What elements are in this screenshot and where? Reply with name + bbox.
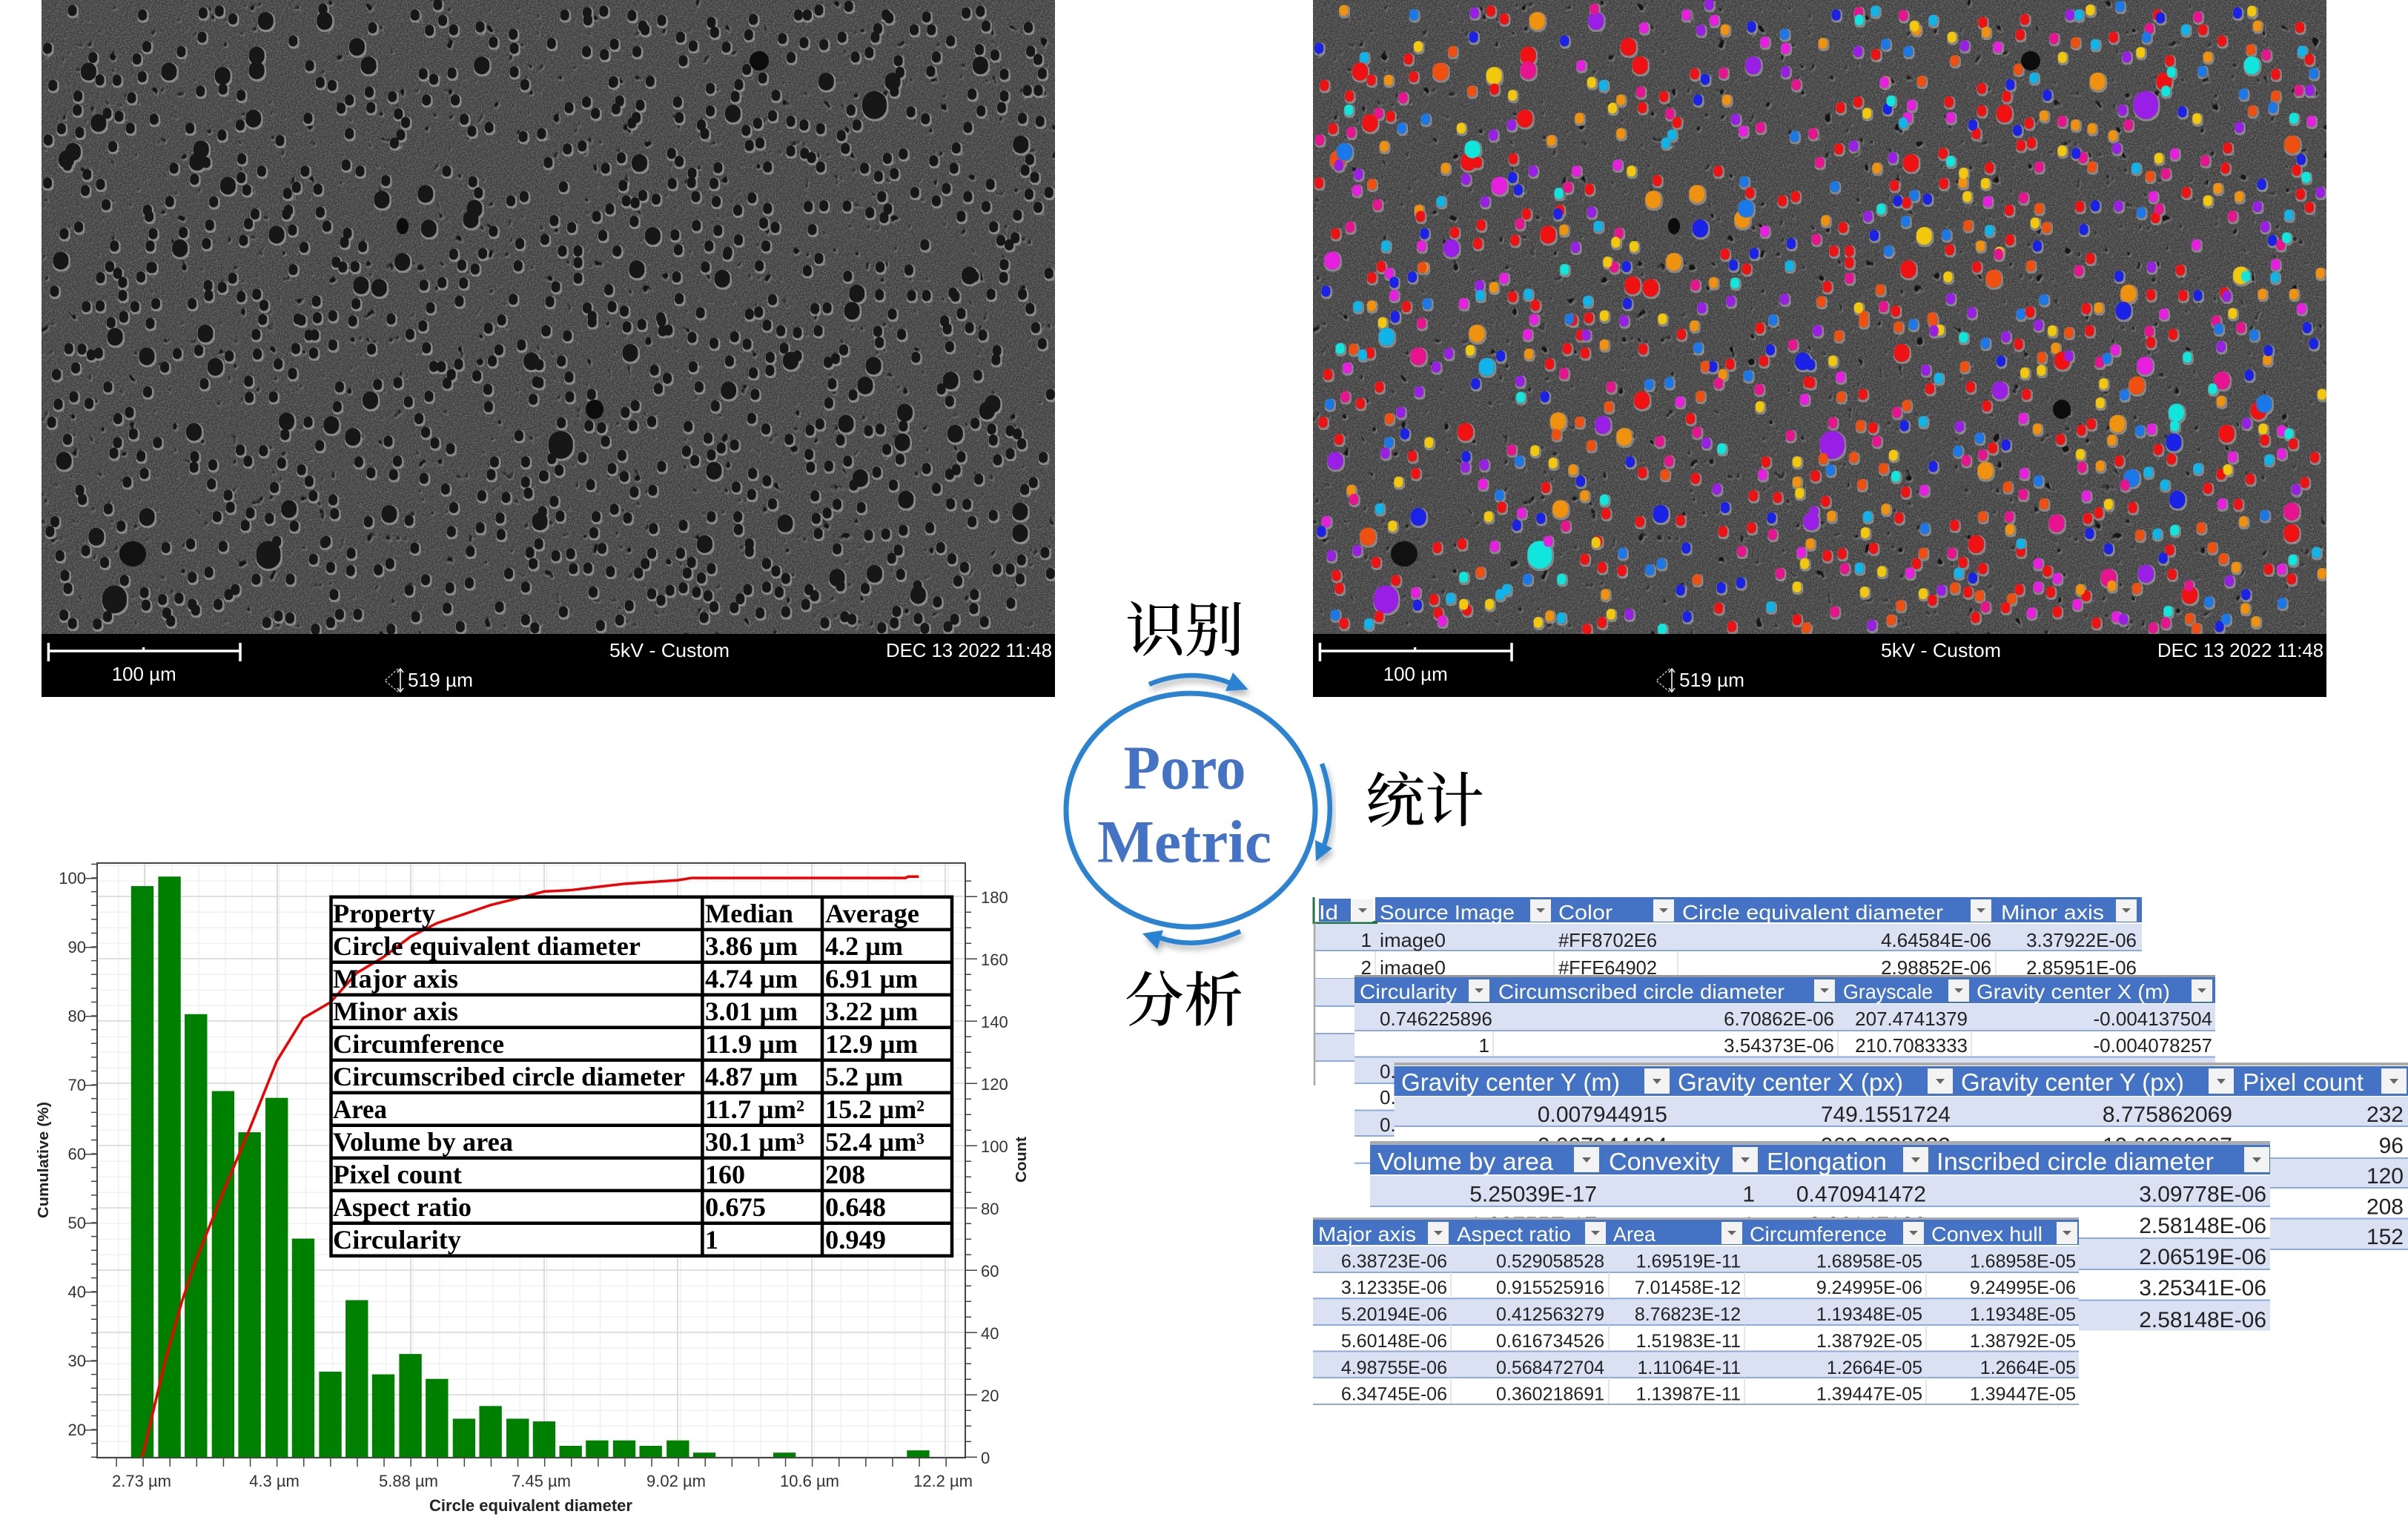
spreadsheet layer 4: volume, convexity, elongation: 3.09778E-06 bbox=[2139, 1182, 2266, 1207]
spreadsheet layer 4: volume, convexity, elongation: 1 bbox=[1742, 1182, 1755, 1207]
SEM image: segmented pores in colour: 100 µm bbox=[1383, 663, 1448, 685]
right axis labels: 20 bbox=[981, 1387, 999, 1405]
spreadsheet layer 4: volume, convexity, elongation: Volume by area bbox=[1377, 1148, 1554, 1175]
spreadsheet layer 3: gravity center, pixel count: 8.775862069 bbox=[2103, 1103, 2232, 1127]
SEM image: segmented pores in colour: DEC 13 2022 11:48 bbox=[2157, 639, 2323, 661]
x axis labels: 12.2 µm bbox=[913, 1472, 973, 1490]
spreadsheet layer 5: major axis, aspect ratio, area: 7.01458E-12 bbox=[1635, 1278, 1741, 1298]
pore property statistics table: 3.22 µm bbox=[825, 997, 918, 1026]
right axis labels: 80 bbox=[981, 1200, 999, 1218]
spreadsheet layer 3: gravity center, pixel count: Gravity center Y (px) bbox=[1961, 1068, 2184, 1096]
spreadsheet layer 4: volume, convexity, elongation: Convexity bbox=[1609, 1148, 1721, 1175]
right axis labels: 60 bbox=[981, 1262, 999, 1280]
label: statistics: 统计 bbox=[1366, 770, 1484, 835]
spreadsheet layer 1: id, source image, color: 3.37922E-06 bbox=[2026, 929, 2137, 951]
spreadsheet layer 5: major axis, aspect ratio, area: 6.34745E-06 bbox=[1341, 1384, 1447, 1405]
label: identify: 识别 bbox=[1125, 599, 1244, 664]
arrow: identify bbox=[1149, 672, 1248, 691]
spreadsheet layer 5: major axis, aspect ratio, area: 0.616734526 bbox=[1496, 1331, 1604, 1352]
pore property statistics table: Volume by area bbox=[333, 1127, 513, 1157]
spreadsheet layer 3: gravity center, pixel count: Gravity center X (px) bbox=[1678, 1068, 1903, 1096]
SEM image: original micrograph: DEC 13 2022 11:48 bbox=[886, 639, 1052, 661]
arrow: statistics bbox=[1315, 764, 1332, 862]
spreadsheet layer 5: major axis, aspect ratio, area: Circumference bbox=[1750, 1223, 1887, 1246]
pore property statistics table: 5.2 µm bbox=[825, 1062, 903, 1091]
central cycle diagram bbox=[1066, 599, 1484, 1034]
pore property statistics table bbox=[331, 897, 952, 1256]
spreadsheet layer 5: major axis, aspect ratio, area: 1.68958E-05 bbox=[1816, 1252, 1922, 1272]
spreadsheet layer 2: circularity, grayscale: 210.7083333 bbox=[1855, 1034, 1968, 1057]
spreadsheet layer 5: major axis, aspect ratio, area: 1.11064E-11 bbox=[1638, 1358, 1741, 1378]
spreadsheet layer 5: major axis, aspect ratio, area: 1.2664E-05 bbox=[1980, 1358, 2076, 1378]
spreadsheet layer 5: major axis, aspect ratio, area: 1.38792E-05 bbox=[1816, 1331, 1922, 1352]
spreadsheet layer 3: gravity center, pixel count: 0.007944915 bbox=[1538, 1103, 1667, 1127]
spreadsheet layer 1: id, source image, color: #FFE64902 bbox=[1558, 956, 1657, 979]
spreadsheet layer 5: major axis, aspect ratio, area: 1.19348E-05 bbox=[1816, 1304, 1922, 1325]
spreadsheet layer 2: circularity, grayscale: 1 bbox=[1479, 1034, 1489, 1057]
pore property statistics table: Major axis bbox=[333, 964, 458, 994]
spreadsheet layer 2: circularity, grayscale: -0.004078257 bbox=[2094, 1034, 2212, 1057]
left axis labels: 60 bbox=[68, 1145, 86, 1163]
spreadsheet layer 2: circularity, grayscale: 0. bbox=[1380, 1114, 1396, 1136]
circle with PoroMetric title: Poro bbox=[1124, 734, 1246, 803]
pore property statistics table: 160 bbox=[705, 1160, 745, 1189]
pore property statistics table: 1 bbox=[705, 1225, 718, 1255]
spreadsheet layer 3: gravity center, pixel count: 152 bbox=[2366, 1225, 2404, 1249]
pore property statistics table: Property bbox=[333, 899, 435, 928]
spreadsheet layer 4: volume, convexity, elongation: 0.470941472 bbox=[1796, 1182, 1926, 1207]
pore property statistics table: 12.9 µm bbox=[825, 1029, 918, 1059]
SEM image: original micrograph: 519 µm bbox=[408, 669, 473, 691]
spreadsheet layer 4: volume, convexity, elongation: 5.25039E-17 bbox=[1469, 1182, 1597, 1207]
spreadsheet layer 1: id, source image, color: Color bbox=[1558, 901, 1612, 924]
pore property statistics table: 15.2 µm² bbox=[825, 1094, 924, 1124]
spreadsheet layer 5: major axis, aspect ratio, area: 6.38723E-06 bbox=[1341, 1252, 1447, 1272]
spreadsheet layer 5: major axis, aspect ratio, area: 1.38792E-05 bbox=[1970, 1331, 2076, 1352]
spreadsheet layer 2: circularity, grayscale: Grayscale bbox=[1843, 980, 1933, 1003]
pore property statistics table: Pixel count bbox=[333, 1160, 462, 1189]
spreadsheet layer 5: major axis, aspect ratio, area: 5.60148E-06 bbox=[1341, 1331, 1447, 1352]
spreadsheet layer 5: major axis, aspect ratio, area: 5.20194E-06 bbox=[1341, 1304, 1447, 1325]
spreadsheet layer 3: gravity center, pixel count: 96 bbox=[2379, 1134, 2404, 1158]
left axis labels: 80 bbox=[68, 1007, 86, 1025]
spreadsheet layer 5: major axis, aspect ratio, area: 4.98755E-06 bbox=[1341, 1358, 1447, 1378]
left axis labels: 70 bbox=[68, 1076, 86, 1094]
spreadsheet layer 5: major axis, aspect ratio, area: 1.69519E-11 bbox=[1636, 1252, 1741, 1272]
x axis labels: 10.6 µm bbox=[780, 1472, 839, 1490]
green histogram bars bbox=[131, 876, 930, 1457]
right axis title: Count bbox=[1013, 1137, 1030, 1183]
spreadsheet layer 3: gravity center, pixel count: Gravity center Y (m) bbox=[1401, 1068, 1620, 1096]
pore property statistics table: Circle equivalent diameter bbox=[333, 931, 641, 961]
pore property statistics table: Minor axis bbox=[333, 997, 458, 1026]
left axis title: Cumulative (%) bbox=[36, 1102, 52, 1218]
spreadsheet layer 4: volume, convexity, elongation: Elongation bbox=[1767, 1148, 1887, 1175]
spreadsheet layer 1: id, source image, color: Id bbox=[1319, 901, 1338, 924]
right axis labels: 180 bbox=[981, 888, 1008, 907]
left axis labels: 40 bbox=[68, 1283, 86, 1301]
SEM image: original micrograph bbox=[42, 0, 1055, 697]
pore property statistics table: 52.4 µm³ bbox=[825, 1127, 924, 1157]
spreadsheet layer 5: major axis, aspect ratio, area: 0.360218691 bbox=[1496, 1384, 1604, 1405]
spreadsheet layer 5: major axis, aspect ratio, area: 3.12335E-06 bbox=[1341, 1278, 1447, 1298]
spreadsheet layer 1: id, source image, color: Minor axis bbox=[2001, 901, 2104, 924]
spreadsheet layer 5: major axis, aspect ratio, area: 1.2664E-05 bbox=[1827, 1358, 1922, 1378]
pore property statistics table: Aspect ratio bbox=[333, 1192, 472, 1222]
pore property statistics table: 208 bbox=[825, 1160, 865, 1189]
right axis labels: 140 bbox=[981, 1013, 1008, 1031]
pore property statistics table: 3.86 µm bbox=[705, 931, 798, 961]
pore property statistics table: Area bbox=[333, 1094, 387, 1124]
spreadsheet layer 3: gravity center, pixel count: 749.1551724 bbox=[1821, 1103, 1951, 1127]
spreadsheet layer 5: major axis, aspect ratio, area: 8.76823E-12 bbox=[1635, 1304, 1741, 1325]
SEM image: original micrograph: 100 µm bbox=[112, 663, 176, 685]
spreadsheet layer 3: gravity center, pixel count: 960.2222222 bbox=[1821, 1134, 1951, 1158]
spreadsheet layer 1: id, source image, color: 2.85951E-06 bbox=[2026, 956, 2137, 979]
circle with PoroMetric title bbox=[1066, 693, 1315, 927]
pore property statistics table: Average bbox=[825, 899, 919, 928]
spreadsheet layer 2: circularity, grayscale: Circumscribed circle diameter bbox=[1498, 980, 1784, 1003]
pore property statistics table: Circularity bbox=[333, 1225, 461, 1255]
SEM image: segmented pores in colour: 519 µm bbox=[1679, 669, 1744, 691]
spreadsheet layer 5: major axis, aspect ratio, area: Aspect ratio bbox=[1457, 1223, 1571, 1246]
x axis labels: 2.73 µm bbox=[112, 1472, 171, 1490]
SEM image: segmented pores in colour: 5kV - Custom bbox=[1881, 639, 2001, 661]
spreadsheet layer 2: circularity, grayscale: Gravity center X (m) bbox=[1977, 980, 2170, 1003]
right axis labels: 100 bbox=[981, 1137, 1008, 1156]
red cumulative curve bbox=[142, 876, 919, 1457]
spreadsheet layer 5: major axis, aspect ratio, area: Major axis bbox=[1318, 1223, 1416, 1246]
left axis labels: 90 bbox=[68, 938, 86, 956]
spreadsheet layer 5: major axis, aspect ratio, area: 9.24995E-06 bbox=[1970, 1278, 2076, 1298]
spreadsheet layer 3: gravity center, pixel count: 120 bbox=[2366, 1164, 2404, 1189]
spreadsheet layer 1: id, source image, color: 2.98852E-06 bbox=[1881, 956, 1991, 979]
pore property statistics table: Circumference bbox=[333, 1029, 504, 1059]
label: analysis: 分析 bbox=[1125, 969, 1243, 1034]
spreadsheet layer 1: id, source image, color: 2 bbox=[1361, 956, 1372, 979]
spreadsheet layer 4: volume, convexity, elongation: Inscribed circle diameter bbox=[1936, 1148, 2214, 1175]
pore property statistics table: 3.01 µm bbox=[705, 997, 798, 1026]
left axis labels: 20 bbox=[68, 1421, 86, 1439]
circle with PoroMetric title: Metric bbox=[1097, 808, 1271, 876]
spreadsheet layer 5: major axis, aspect ratio, area: 0.412563279 bbox=[1496, 1304, 1604, 1325]
spreadsheet layer 5: major axis, aspect ratio, area: Area bbox=[1613, 1223, 1656, 1246]
spreadsheet layer 3: gravity center, pixel count: 232 bbox=[2366, 1103, 2404, 1127]
left axis labels bbox=[59, 869, 86, 1439]
pore property statistics table: 11.7 µm² bbox=[705, 1094, 804, 1124]
spreadsheet layer 1: id, source image, color: Source Image bbox=[1380, 901, 1515, 924]
spreadsheet layer 1: id, source image, color: Circle equivalent diameter bbox=[1682, 901, 1943, 924]
pore property statistics table: 0.648 bbox=[825, 1192, 886, 1222]
spreadsheet layer 4: volume, convexity, elongation: 2.06519E-06 bbox=[2139, 1245, 2266, 1269]
right axis labels: 0 bbox=[981, 1449, 990, 1467]
spreadsheet layer 1: id, source image, color bbox=[1314, 897, 2142, 1085]
spreadsheet layer 2: circularity, grayscale: 207.4741379 bbox=[1855, 1008, 1968, 1030]
x axis title: Circle equivalent diameter bbox=[429, 1496, 632, 1515]
spreadsheet layer 1: id, source image, color: image0 bbox=[1380, 956, 1446, 979]
spreadsheet layer 5: major axis, aspect ratio, area: 0.529058528 bbox=[1496, 1252, 1604, 1272]
spreadsheet layer 5: major axis, aspect ratio, area: 1.68958E-05 bbox=[1970, 1252, 2076, 1272]
spreadsheet layer 1: id, source image, color: #FF8702E6 bbox=[1558, 929, 1657, 951]
spreadsheet layer 5: major axis, aspect ratio, area: 9.24995E-06 bbox=[1816, 1278, 1922, 1298]
arrow: analysis bbox=[1142, 930, 1240, 949]
pore property statistics table: 4.74 µm bbox=[705, 964, 798, 994]
left axis labels: 30 bbox=[68, 1352, 86, 1370]
spreadsheet layer 2: circularity, grayscale: 3.54373E-06 bbox=[1724, 1034, 1834, 1057]
right axis labels: 160 bbox=[981, 951, 1008, 969]
spreadsheet layer 2: circularity, grayscale: -0.004137504 bbox=[2094, 1008, 2212, 1030]
spreadsheet layer 3: gravity center, pixel count: 0.007944494 bbox=[1538, 1134, 1667, 1158]
x axis labels: 9.02 µm bbox=[646, 1472, 706, 1490]
spreadsheet layer 4: volume, convexity, elongation: 2.58148E-06 bbox=[2139, 1308, 2266, 1332]
SEM image: segmented pores in colour bbox=[1313, 0, 2326, 697]
spreadsheet layer 3: gravity center, pixel count: 10.66666667 bbox=[2103, 1134, 2232, 1158]
pore property statistics table: 30.1 µm³ bbox=[705, 1127, 804, 1157]
pore property statistics table: Circumscribed circle diameter bbox=[333, 1062, 685, 1091]
spreadsheet layer 5: major axis, aspect ratio, area bbox=[1313, 1217, 2079, 1405]
right axis labels: 120 bbox=[981, 1075, 1008, 1094]
spreadsheet layer 5: major axis, aspect ratio, area: 1.19348E-05 bbox=[1970, 1304, 2076, 1325]
left axis labels: 100 bbox=[59, 869, 86, 888]
spreadsheet layer 2: circularity, grayscale: 0. bbox=[1380, 1086, 1396, 1108]
x axis labels: 4.3 µm bbox=[249, 1472, 300, 1490]
spreadsheet layer 5: major axis, aspect ratio, area: 1.39447E-05 bbox=[1816, 1384, 1922, 1405]
spreadsheet layer 4: volume, convexity, elongation: 0.96147196 bbox=[1809, 1213, 1926, 1237]
histogram chart with cumulative curve bbox=[36, 863, 1030, 1515]
spreadsheet layer 5: major axis, aspect ratio, area: 0.915525916 bbox=[1496, 1278, 1604, 1298]
pore property statistics table: 11.9 µm bbox=[705, 1029, 798, 1059]
spreadsheet layer 2: circularity, grayscale: 0.746225896 bbox=[1380, 1008, 1492, 1030]
spreadsheet layer 4: volume, convexity, elongation: 2.58148E-06 bbox=[2139, 1214, 2266, 1238]
spreadsheet layer 4: volume, convexity, elongation: 3.25341E-06 bbox=[2139, 1276, 2266, 1301]
spreadsheet layer 5: major axis, aspect ratio, area: 1.13987E-11 bbox=[1636, 1384, 1741, 1405]
spreadsheet layer 3: gravity center, pixel count bbox=[1394, 1063, 2408, 1249]
spreadsheet layer 1: id, source image, color: 4.64584E-06 bbox=[1881, 929, 1991, 951]
spreadsheet layer 2: circularity, grayscale: Circularity bbox=[1360, 980, 1457, 1003]
spreadsheet layer 3: gravity center, pixel count: 208 bbox=[2366, 1195, 2404, 1219]
pore property statistics table: 4.87 µm bbox=[705, 1062, 798, 1091]
x axis labels bbox=[112, 1472, 973, 1490]
pore property statistics table: Median bbox=[705, 899, 793, 928]
spreadsheet layer 4: volume, convexity, elongation: 1 bbox=[1742, 1213, 1755, 1237]
x axis labels: 5.88 µm bbox=[379, 1472, 438, 1490]
spreadsheet layer 5: major axis, aspect ratio, area: 1.39447E-05 bbox=[1970, 1384, 2076, 1405]
pore property statistics table: 0.675 bbox=[705, 1192, 766, 1222]
left axis labels: 50 bbox=[68, 1214, 86, 1232]
spreadsheet layer 4: volume, convexity, elongation bbox=[1370, 1141, 2270, 1332]
spreadsheet layer 1: id, source image, color: image0 bbox=[1380, 929, 1446, 951]
pore property statistics table: 0.949 bbox=[825, 1225, 886, 1255]
right axis labels: 40 bbox=[981, 1324, 999, 1343]
spreadsheet layer 2: circularity, grayscale: 0. bbox=[1380, 1060, 1396, 1083]
spreadsheet layer 2: circularity, grayscale bbox=[1354, 975, 2215, 1163]
spreadsheet layer 4: volume, convexity, elongation: 1.98755E-17 bbox=[1469, 1213, 1597, 1237]
spreadsheet layer 5: major axis, aspect ratio, area: 1.51983E-11 bbox=[1636, 1331, 1741, 1352]
spreadsheet layer 5: major axis, aspect ratio, area: Convex hull bbox=[1931, 1223, 2042, 1246]
pore property statistics table: 6.91 µm bbox=[825, 964, 918, 994]
right axis labels bbox=[981, 888, 1008, 1467]
spreadsheet layer 3: gravity center, pixel count: Pixel count bbox=[2243, 1068, 2364, 1096]
pore property statistics table: 4.2 µm bbox=[825, 931, 903, 961]
spreadsheet layer 5: major axis, aspect ratio, area: 0.568472704 bbox=[1496, 1358, 1604, 1378]
SEM image: original micrograph: 5kV - Custom bbox=[609, 639, 730, 661]
spreadsheet layer 1: id, source image, color: 1 bbox=[1361, 929, 1372, 951]
spreadsheet layer 2: circularity, grayscale: 6.70862E-06 bbox=[1724, 1008, 1834, 1030]
x axis labels: 7.45 µm bbox=[512, 1472, 571, 1490]
